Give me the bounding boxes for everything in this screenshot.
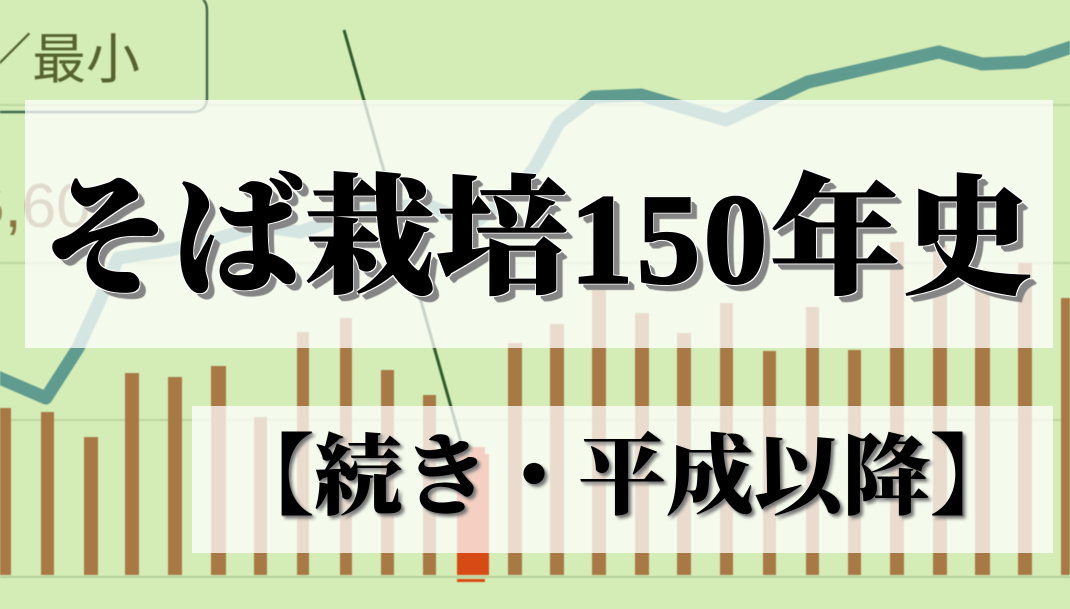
panel: title background (25, 100, 1053, 348)
title: そば栽培150年史 (41, 168, 1034, 312)
legend box (0, 0, 207, 112)
leader line (344, 30, 461, 442)
brown bars (0, 227, 1070, 575)
highlighted minimum bar (457, 447, 489, 582)
teal trend line (0, 46, 1070, 398)
panel: subtitle background (192, 406, 1053, 553)
subtitle: 【続き・平成以降】 (226, 430, 1018, 527)
